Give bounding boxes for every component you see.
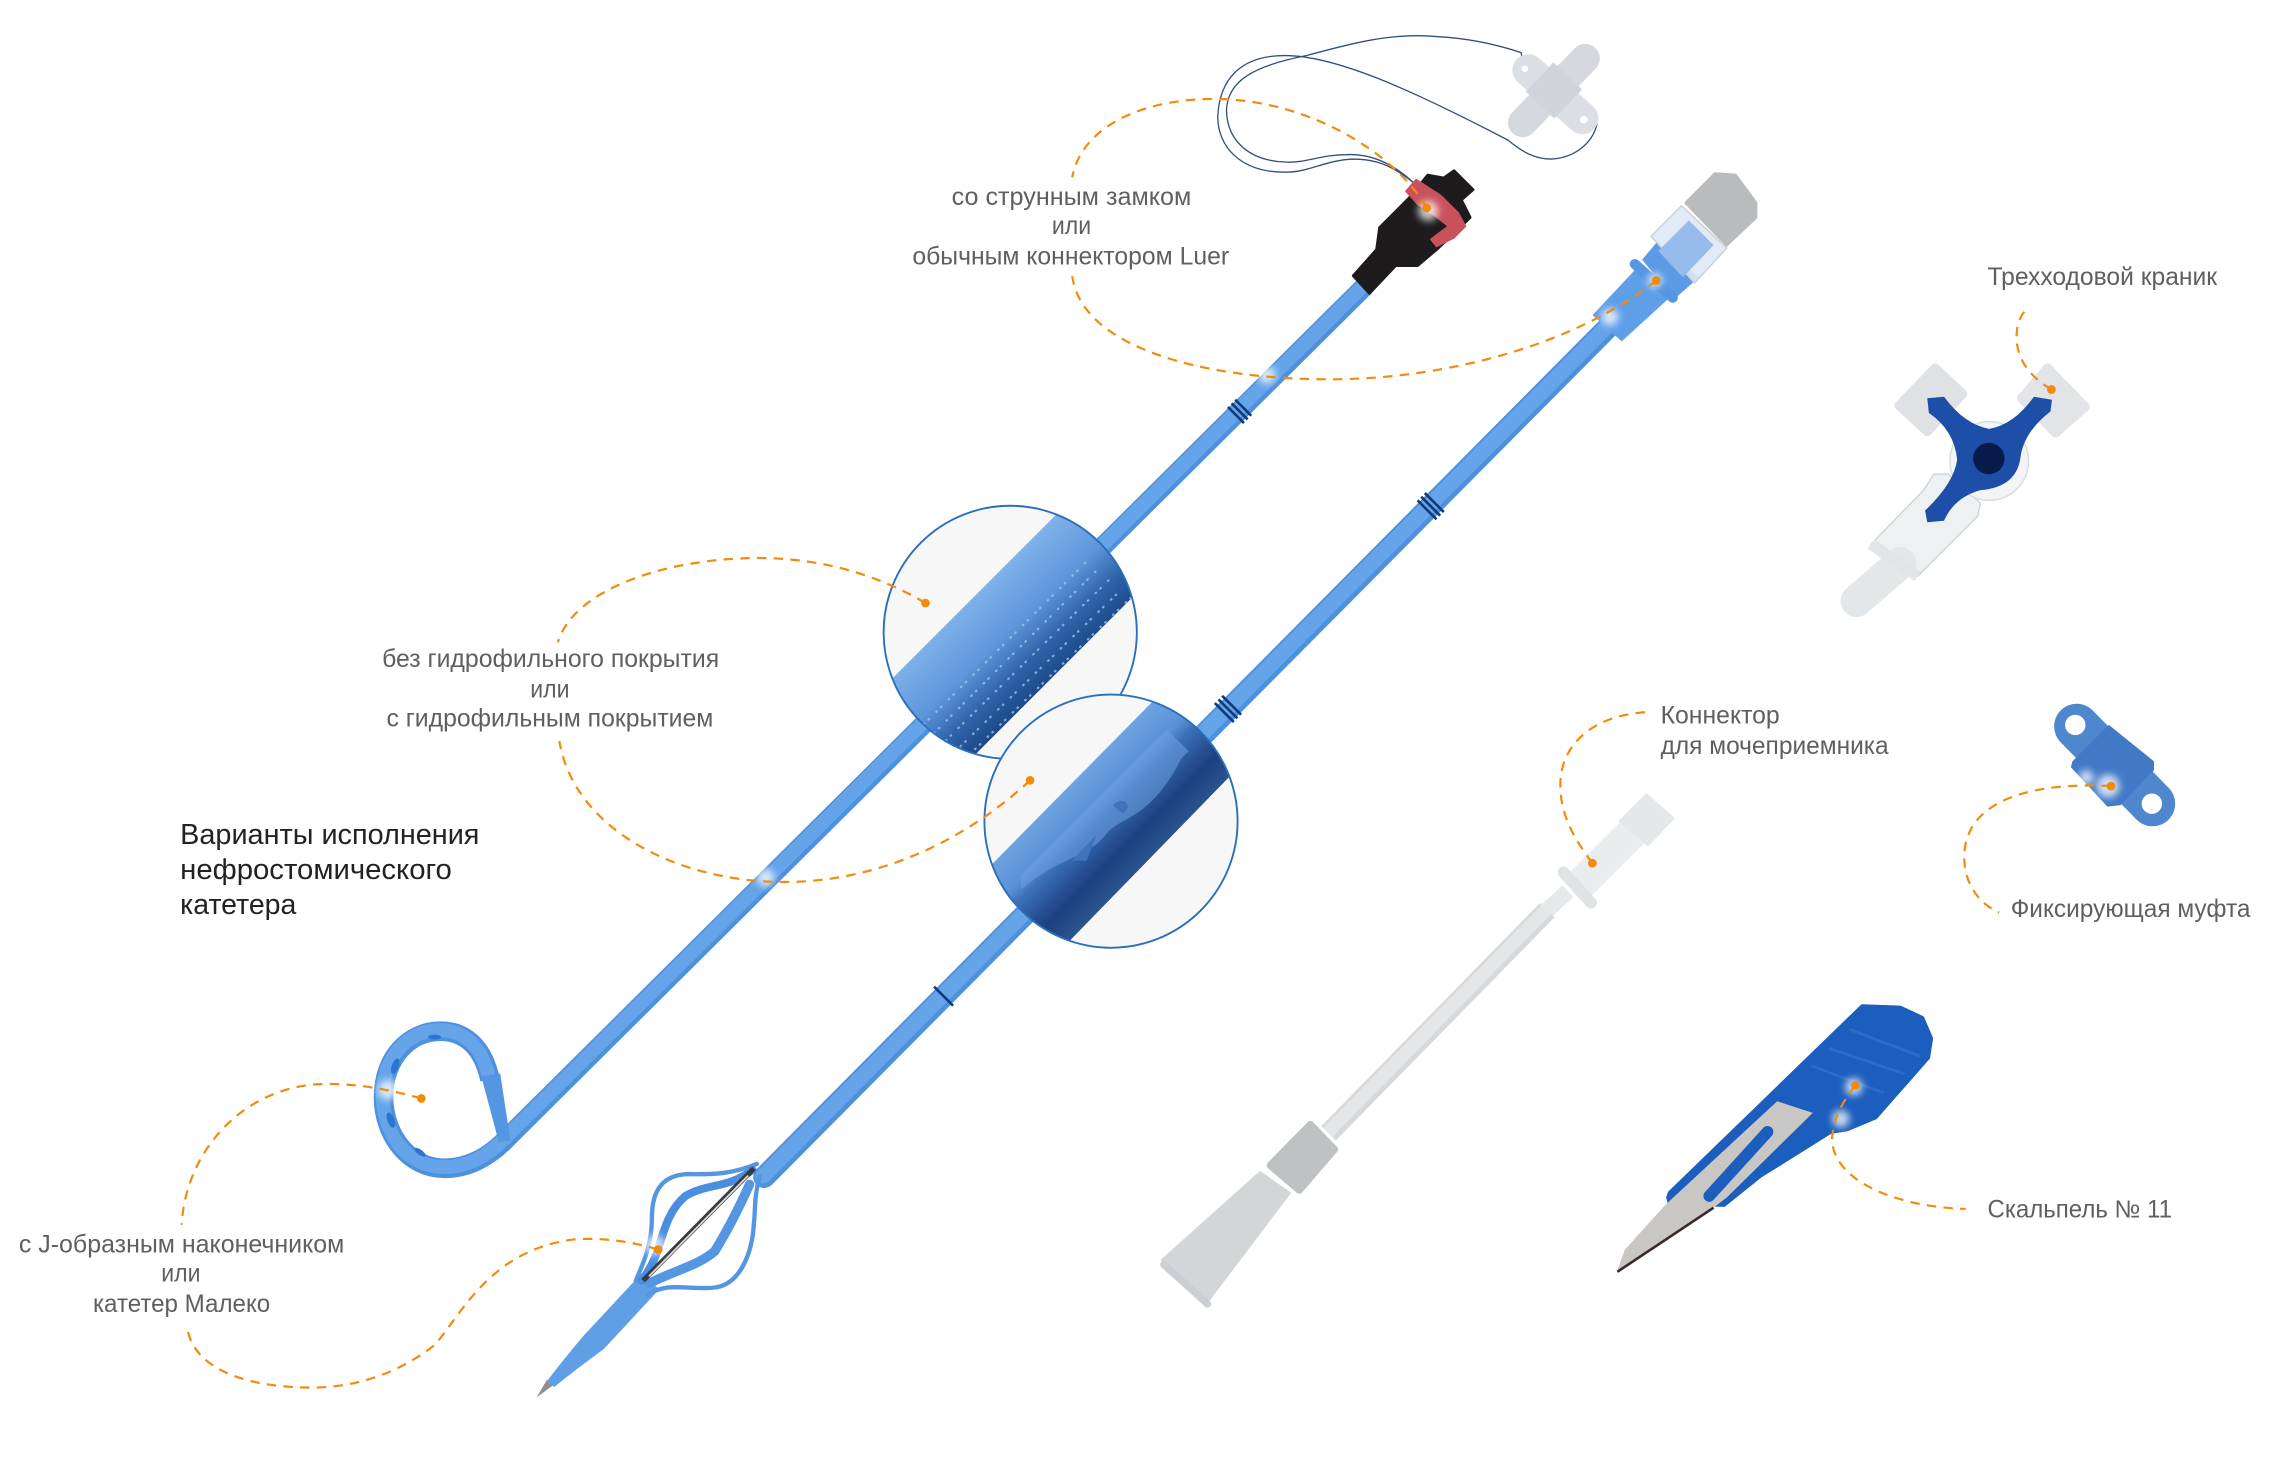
magnified tube — [893, 515, 1132, 754]
right port — [2021, 368, 2085, 433]
catheter with Malecot tip (lower) — [537, 321, 1613, 1397]
label: three-way stopcock: Трехходовой краник — [1987, 264, 2217, 291]
collar — [1871, 544, 1918, 576]
magnified circle: without hydrophilic coating — [882, 504, 1138, 760]
string-lock connector — [1218, 36, 1597, 293]
barrel centre — [1540, 76, 1568, 105]
ribbed sleeve — [1593, 268, 1673, 341]
white tube — [1329, 910, 1547, 1133]
flange — [1635, 264, 1673, 298]
label: coating options: без гидрофильного покрытия — [382, 646, 719, 673]
label: tip options: катетер Малеко — [93, 1291, 270, 1318]
funnel — [1162, 1173, 1289, 1301]
label: bag connector: Коннектор — [1661, 703, 1780, 730]
strap — [2077, 726, 2153, 804]
callout: connector to string lock — [1072, 99, 1431, 212]
neck — [1547, 891, 1568, 910]
callout: no coating — [558, 558, 930, 642]
label: connector options — [912, 184, 1229, 271]
callout: Malecot — [187, 1239, 662, 1388]
label: connector options: обычным коннектором Luer — [912, 244, 1229, 271]
title: Варианты исполнения — [180, 819, 479, 851]
label: tip options: с J-образным наконечником — [19, 1231, 344, 1258]
lower tube — [763, 321, 1613, 1177]
barrel — [1523, 58, 1585, 123]
catheter with J-tip (upper) — [383, 285, 1365, 1168]
callout: scalpel — [1832, 1081, 1966, 1209]
luer connector of lower catheter — [1593, 174, 1756, 341]
callout lines and dots — [182, 99, 2115, 1388]
handle hole — [1973, 443, 2005, 474]
title: катетера — [180, 889, 297, 921]
white glow spots under callout dots — [378, 201, 2120, 1255]
needle tip — [537, 1380, 553, 1397]
hub disc — [1950, 422, 2029, 500]
callout: bag connector — [1560, 712, 1650, 867]
blue handle — [1925, 397, 2052, 522]
body — [2071, 725, 2154, 807]
clear body — [1871, 474, 1980, 576]
label: connector options: со струнным замком — [952, 184, 1191, 211]
grip ribs — [1813, 1030, 1919, 1092]
red lock clip — [1406, 180, 1466, 247]
clear hub — [1651, 206, 1727, 283]
Malecot wings — [636, 1164, 760, 1295]
three-way stopcock — [1857, 368, 2085, 601]
callout: J-tip — [182, 1084, 426, 1225]
tether string — [1218, 36, 1597, 182]
funnel lip — [1164, 1265, 1208, 1304]
blade edge — [1617, 1208, 1714, 1272]
inner blue core — [1658, 220, 1714, 277]
label: connector options: или — [1052, 213, 1091, 240]
luer lock head — [1620, 795, 1673, 845]
holes — [2065, 715, 2162, 814]
tapered tip — [547, 1273, 659, 1387]
blue stem — [1642, 242, 1699, 299]
label: coating options: с гидрофильным покрытием — [386, 706, 713, 733]
fixing clamp — [2065, 715, 2162, 814]
blade — [1617, 1101, 1813, 1270]
black body — [1353, 171, 1473, 293]
upper catheter depth marks — [1228, 400, 1251, 423]
lower catheter depth marks — [934, 493, 1444, 1006]
title — [180, 819, 479, 921]
collar — [1270, 1125, 1334, 1190]
luer lock body — [1575, 828, 1636, 890]
label: coating options: или — [530, 676, 570, 703]
blade slot — [1709, 1132, 1768, 1196]
wing plate — [1528, 70, 1582, 118]
callout: with coating — [559, 741, 1034, 882]
label: coating options — [382, 646, 719, 733]
magnified coated tube — [992, 702, 1229, 940]
label: fixing clamp: Фиксирующая муфта — [2011, 896, 2251, 923]
callout: stopcock — [2017, 308, 2056, 394]
luer lock collar — [1563, 872, 1591, 903]
magnified circle: with hydrophilic coating — [983, 694, 1239, 949]
T-clip (string anchor) — [1522, 58, 1588, 123]
nozzle — [1857, 563, 1900, 601]
grey cap — [1686, 174, 1756, 245]
callout: connector to Luer — [1072, 276, 1661, 379]
urine bag connector — [1162, 795, 1673, 1304]
title: нефростомического — [180, 854, 452, 886]
label: tip options — [19, 1231, 344, 1318]
label: bag connector — [1661, 703, 1889, 760]
left port — [1899, 368, 1963, 432]
handle — [1668, 1006, 1931, 1205]
label: tip options: или — [161, 1261, 200, 1288]
label: bag connector: для мочеприемника — [1661, 733, 1889, 760]
scalpel no. 11 — [1617, 1006, 1931, 1272]
Malecot stylet wire — [643, 1168, 754, 1281]
label: scalpel: Скальпель № 11 — [1987, 1197, 2172, 1224]
callout: clamp — [1964, 782, 2115, 913]
eyelets — [1522, 65, 1588, 123]
J-loop tube — [383, 285, 1365, 1168]
